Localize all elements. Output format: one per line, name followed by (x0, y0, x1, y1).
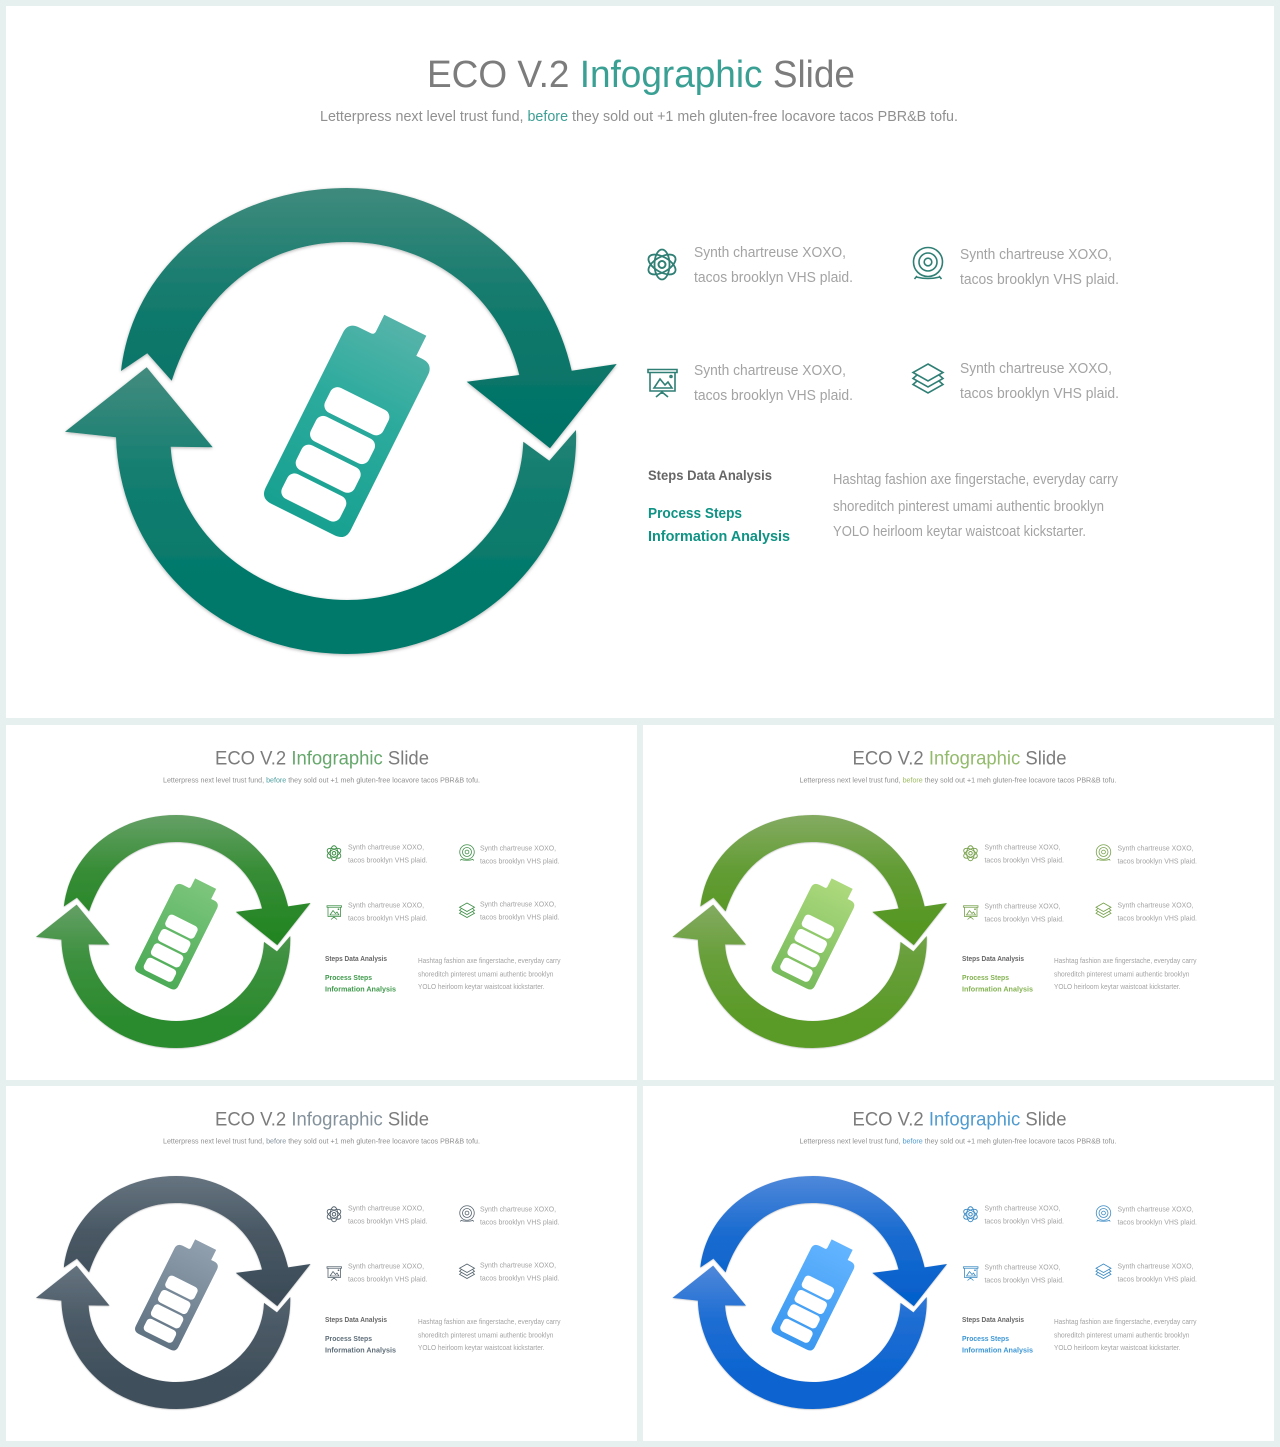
icon: layers (913, 364, 943, 393)
paragraph: Hashtag fashion axe fingerstache, everyday carry (833, 472, 1119, 488)
paragraph (1054, 1317, 1197, 1352)
icon: battery (260, 302, 443, 541)
text: feature three: Synth chartreuse XOXO, (984, 902, 1060, 910)
paragraph: shoreditch pinterest umami authentic brooklyn (1054, 1330, 1190, 1340)
paragraph: shoreditch pinterest umami authentic brooklyn (833, 499, 1104, 515)
panel: lime slide (643, 725, 1274, 1080)
text: feature four (480, 1260, 560, 1282)
panel: green slide (6, 725, 637, 1080)
icon: battery (770, 872, 861, 991)
text: feature two: tacos brooklyn VHS plaid. (1118, 1218, 1197, 1226)
text: feature four: Synth chartreuse XOXO, (1118, 1262, 1194, 1270)
panel: slate slide (6, 1086, 637, 1441)
text: feature three: tacos brooklyn VHS plaid. (348, 1274, 428, 1284)
text: feature four (1118, 900, 1197, 922)
cycle arrows (36, 815, 310, 1048)
text: feature three: Synth chartreuse XOXO, (984, 1262, 1060, 1272)
paragraph (418, 1317, 561, 1352)
subtitle: Letterpress next level trust fund, before they sold out +1 meh gluten-free locavore tacos PBR&B tofu. (163, 776, 480, 784)
panel: blue slide (643, 1086, 1274, 1441)
text: feature three: tacos brooklyn VHS plaid. (984, 914, 1064, 924)
text: feature three: tacos brooklyn VHS plaid. (694, 387, 853, 404)
paragraph: Hashtag fashion axe fingerstache, everyday carry (1054, 956, 1197, 965)
text: feature three (984, 1262, 1064, 1284)
text: feature two (960, 246, 1119, 288)
cycle arrows (36, 1176, 310, 1409)
paragraph: shoreditch pinterest umami authentic brooklyn (1054, 970, 1190, 978)
slate slide content (36, 1110, 561, 1409)
heading: process steps: Process Steps (325, 973, 372, 982)
icon: atom (645, 250, 679, 280)
text: feature two: Synth chartreuse XOXO, (960, 246, 1112, 263)
subtitle: Letterpress next level trust fund, before they sold out +1 meh gluten-free locavore tacos PBR&B tofu. (163, 1136, 480, 1146)
text: feature two: Synth chartreuse XOXO, (1118, 844, 1194, 852)
icon: layers (460, 1264, 474, 1278)
heading: steps data analysis: Steps Data Analysis (962, 1317, 1024, 1324)
cycle arrows (65, 188, 617, 654)
text: feature four (960, 360, 1119, 402)
text: feature four (1118, 1262, 1197, 1284)
text: feature one: tacos brooklyn VHS plaid. (984, 1216, 1064, 1226)
text: feature two (480, 844, 560, 866)
heading: process steps: Process Steps (962, 1334, 1009, 1343)
paragraph: YOLO heirloom keytar waistcoat kickstarter. (833, 524, 1086, 540)
subtitle: Letterpress next level trust fund, before they sold out +1 meh gluten-free locavore tacos PBR&B tofu. (800, 1136, 1116, 1146)
subtitle: Letterpress next level trust fund, before they sold out +1 meh gluten-free locavore tacos PBR&B tofu. (320, 109, 958, 125)
icon: target (460, 845, 474, 860)
text: feature one (694, 244, 853, 286)
text: feature four: Synth chartreuse XOXO, (960, 360, 1112, 377)
text: feature four: tacos brooklyn VHS plaid. (1118, 1274, 1197, 1284)
panel: main teal slide (6, 6, 1274, 718)
icon: presentation board (327, 1267, 342, 1280)
icon: layers (1096, 903, 1111, 918)
subtitle: Letterpress next level trust fund, before they sold out +1 meh gluten-free locavore tacos PBR&B tofu. (800, 776, 1116, 784)
text: feature one (348, 842, 428, 864)
icon: layers (1096, 1264, 1111, 1278)
text: feature one: Synth chartreuse XOXO, (984, 842, 1060, 852)
text: feature one (348, 1204, 428, 1226)
heading: process steps: Process Steps (962, 973, 1009, 982)
text: feature three (348, 900, 428, 922)
text: feature four: Synth chartreuse XOXO, (480, 900, 556, 908)
paragraph: shoreditch pinterest umami authentic brooklyn (418, 970, 554, 978)
text: feature two: Synth chartreuse XOXO, (1118, 1204, 1194, 1214)
text: feature one: Synth chartreuse XOXO, (348, 1204, 424, 1212)
text: feature two: Synth chartreuse XOXO, (480, 844, 556, 852)
heading: process steps: Process Steps (325, 1334, 372, 1343)
heading: process steps: Process Steps (648, 505, 742, 522)
text: feature two: tacos brooklyn VHS plaid. (480, 856, 560, 866)
title: ECO V.2 Infographic Slide (852, 748, 1066, 770)
paragraph (1054, 956, 1197, 991)
icon: atom (326, 846, 342, 861)
icon: presentation board (964, 1267, 978, 1280)
heading: information analysis: Information Analysis (962, 1346, 1033, 1354)
text: feature three: Synth chartreuse XOXO, (348, 1262, 424, 1270)
text: feature four: Synth chartreuse XOXO, (480, 1260, 556, 1270)
paragraph (418, 956, 561, 991)
heading: information analysis: Information Analysis (962, 984, 1033, 994)
heading: steps data analysis: Steps Data Analysis (648, 467, 772, 483)
text: feature three (348, 1262, 428, 1284)
paragraph: YOLO heirloom keytar waistcoat kickstarter. (1054, 1343, 1180, 1352)
icon: atom (962, 846, 979, 861)
icon: atom (962, 1207, 979, 1222)
cycle arrows (672, 815, 947, 1048)
title: ECO V.2 Infographic Slide (427, 54, 855, 96)
text: feature three (694, 362, 853, 404)
paragraph: shoreditch pinterest umami authentic brooklyn (418, 1330, 554, 1340)
paragraph: YOLO heirloom keytar waistcoat kickstarter. (418, 1343, 544, 1352)
text: feature two (1118, 1204, 1197, 1226)
text: feature three: tacos brooklyn VHS plaid. (984, 1276, 1064, 1284)
lime slide content (672, 748, 1197, 1048)
text: feature four: tacos brooklyn VHS plaid. (1118, 914, 1197, 922)
text: feature four: tacos brooklyn VHS plaid. (480, 1274, 560, 1282)
text: feature two (480, 1204, 560, 1226)
text: feature four: tacos brooklyn VHS plaid. (960, 385, 1119, 402)
heading: steps data analysis: Steps Data Analysis (325, 1317, 387, 1324)
text: feature three: Synth chartreuse XOXO, (694, 362, 846, 379)
text: feature one: Synth chartreuse XOXO, (694, 244, 846, 261)
text: feature one (984, 1204, 1064, 1226)
paragraph: YOLO heirloom keytar waistcoat kickstarter. (1054, 982, 1180, 991)
icon: battery (133, 872, 225, 991)
icon: layers (460, 903, 474, 918)
text: feature one (984, 842, 1064, 864)
heading: steps data analysis: Steps Data Analysis (325, 956, 387, 963)
text: feature one: tacos brooklyn VHS plaid. (348, 856, 428, 864)
title: ECO V.2 Infographic Slide (215, 748, 429, 770)
text: feature four: Synth chartreuse XOXO, (1118, 900, 1194, 910)
icon: presentation board (964, 906, 978, 920)
icon: battery (133, 1233, 225, 1352)
icon: target (1096, 845, 1111, 860)
heading: information analysis: Information Analysis (325, 984, 396, 994)
text: feature three: tacos brooklyn VHS plaid. (348, 914, 428, 922)
paragraph: Hashtag fashion axe fingerstache, everyday carry (1054, 1317, 1197, 1326)
icon: target (914, 248, 942, 279)
blue slide content (672, 1110, 1197, 1409)
text: feature one: Synth chartreuse XOXO, (984, 1204, 1060, 1212)
text: feature one: tacos brooklyn VHS plaid. (694, 269, 853, 286)
text: feature one: tacos brooklyn VHS plaid. (984, 856, 1064, 864)
text: feature two: Synth chartreuse XOXO, (480, 1204, 556, 1214)
text: feature one: Synth chartreuse XOXO, (348, 842, 424, 852)
heading: information analysis: Information Analysis (325, 1346, 396, 1354)
text: feature two: tacos brooklyn VHS plaid. (480, 1218, 560, 1226)
icon: battery (770, 1233, 861, 1352)
text: feature three (984, 902, 1064, 924)
title: ECO V.2 Infographic Slide (215, 1110, 429, 1130)
cycle arrows (672, 1176, 947, 1409)
paragraph: Hashtag fashion axe fingerstache, everyday carry (418, 956, 561, 965)
icon: presentation board (327, 906, 342, 920)
paragraph: Hashtag fashion axe fingerstache, everyday carry (418, 1317, 561, 1326)
text: feature three: Synth chartreuse XOXO, (348, 900, 424, 910)
green slide content (36, 748, 561, 1048)
icon: presentation board (648, 370, 677, 397)
text: feature four (480, 900, 560, 922)
title: ECO V.2 Infographic Slide (852, 1110, 1066, 1130)
heading: information analysis: Information Analysis (648, 528, 790, 545)
text: feature two (1118, 844, 1197, 866)
icon: atom (326, 1207, 342, 1222)
paragraph: YOLO heirloom keytar waistcoat kickstarter. (418, 982, 544, 991)
icon: target (460, 1206, 474, 1222)
text: feature two: tacos brooklyn VHS plaid. (1118, 856, 1197, 866)
heading: steps data analysis: Steps Data Analysis (962, 956, 1024, 963)
paragraph (833, 472, 1119, 540)
text: feature two: tacos brooklyn VHS plaid. (960, 271, 1119, 288)
icon: target (1096, 1206, 1111, 1222)
text: feature one: tacos brooklyn VHS plaid. (348, 1216, 428, 1226)
text: feature four: tacos brooklyn VHS plaid. (480, 912, 560, 922)
